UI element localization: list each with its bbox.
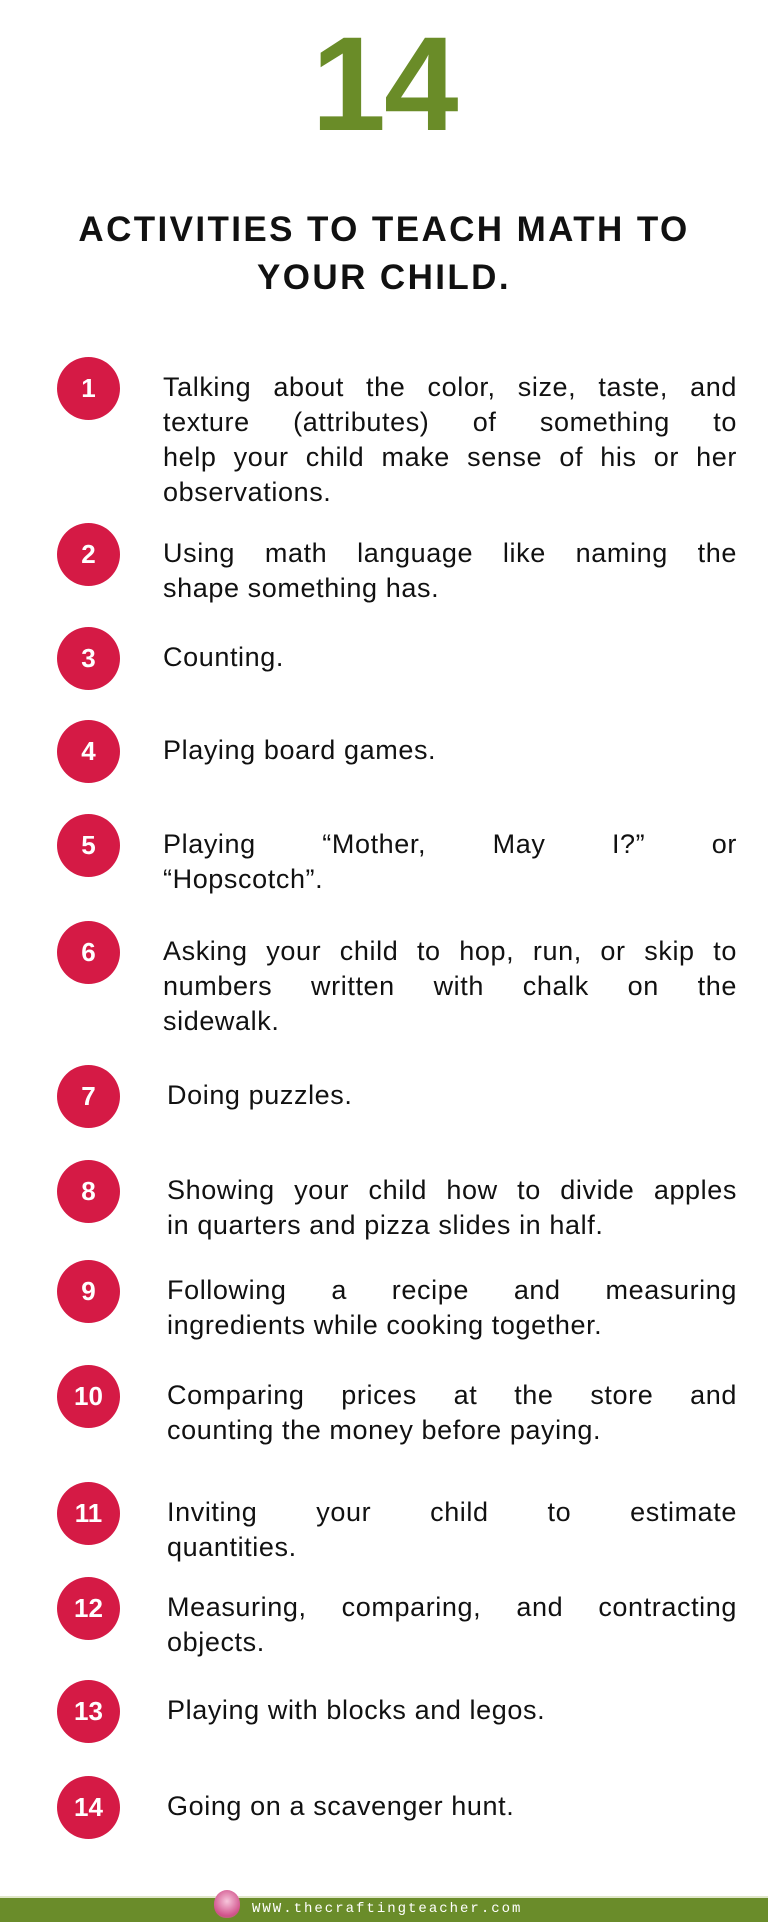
badge 6 (57, 921, 120, 984)
text 12 (167, 1592, 737, 1657)
text 10: Comparing prices at the store and (167, 1380, 737, 1410)
item 10 (57, 1365, 737, 1445)
item 13 (57, 1680, 545, 1743)
text 6: sidewalk. (163, 1006, 279, 1036)
text 1: help your child make sense of his or her (163, 442, 737, 472)
text 2: Using math language like naming the (163, 538, 737, 568)
text 2: shape something has. (163, 573, 439, 603)
badge 13 (57, 1680, 120, 1743)
text 11: quantities. (167, 1532, 297, 1562)
text 1: Talking about the color, size, taste, and (163, 372, 737, 402)
text 13: Playing with blocks and legos. (167, 1695, 545, 1725)
text 3: Counting. (163, 642, 284, 672)
text 9 (167, 1275, 737, 1340)
badge 2 (57, 523, 120, 586)
text 5: Playing “Mother, May I?” or (163, 829, 737, 859)
text 6 (163, 936, 737, 1036)
icon: flower logo (214, 1890, 240, 1918)
badge 11: 11 (75, 1498, 102, 1528)
item 12 (57, 1577, 737, 1657)
badge 14 (57, 1776, 120, 1839)
item 3 (57, 627, 284, 690)
text 8 (167, 1175, 737, 1240)
badge 2: 2 (81, 539, 96, 569)
footer bar (0, 1896, 768, 1922)
badge 4: 4 (81, 736, 96, 766)
text 12: objects. (167, 1627, 265, 1657)
text 5 (163, 829, 737, 894)
item 4 (57, 720, 436, 783)
text 9: ingredients while cooking together. (167, 1310, 602, 1340)
item 14 (57, 1776, 514, 1839)
badge 7: 7 (81, 1081, 96, 1111)
text 1 (163, 372, 737, 507)
text 1: texture (attributes) of something to (163, 407, 737, 437)
text 4: Playing board games. (163, 735, 436, 765)
badge 1 (57, 357, 120, 420)
badge 5 (57, 814, 120, 877)
item 6 (57, 921, 737, 1036)
item 9 (57, 1260, 737, 1340)
badge 12 (57, 1577, 120, 1640)
item 2 (57, 523, 737, 603)
text 5: “Hopscotch”. (163, 864, 323, 894)
badge 5: 5 (81, 830, 96, 860)
item 5 (57, 814, 737, 894)
item 11 (57, 1482, 737, 1562)
badge 6: 6 (81, 937, 96, 967)
badge 7 (57, 1065, 120, 1128)
badge 1: 1 (81, 373, 96, 403)
badge 11 (57, 1482, 120, 1545)
badge 3 (57, 627, 120, 690)
item 8 (57, 1160, 737, 1240)
item 1 (57, 357, 737, 507)
text 14: Going on a scavenger hunt. (167, 1791, 514, 1821)
badge 12: 12 (74, 1593, 103, 1623)
text 6: Asking your child to hop, run, or skip to (163, 936, 737, 966)
text 12: Measuring, comparing, and contracting (167, 1592, 737, 1622)
text 10 (167, 1380, 737, 1445)
title number: 14 (311, 10, 457, 159)
badge 9: 9 (81, 1276, 96, 1306)
heading (78, 210, 690, 297)
heading: YOUR CHILD. (257, 258, 511, 297)
text 2 (163, 538, 737, 603)
badge 4 (57, 720, 120, 783)
badge 14: 14 (74, 1792, 103, 1822)
text 11: Inviting your child to estimate (167, 1497, 737, 1527)
text 11 (167, 1497, 737, 1562)
badge 10: 10 (74, 1381, 103, 1411)
footer url: WWW.thecraftingteacher.com (252, 1901, 522, 1917)
badge 9 (57, 1260, 120, 1323)
text 7: Doing puzzles. (167, 1080, 352, 1110)
text 1: observations. (163, 477, 331, 507)
text 10: counting the money before paying. (167, 1415, 601, 1445)
item 7 (57, 1065, 352, 1128)
badge 8: 8 (81, 1176, 96, 1206)
badge 3: 3 (81, 643, 96, 673)
text 8: Showing your child how to divide apples (167, 1175, 737, 1205)
badge 13: 13 (74, 1696, 103, 1726)
badge 8 (57, 1160, 120, 1223)
text 6: numbers written with chalk on the (163, 971, 737, 1001)
text 8: in quarters and pizza slides in half. (167, 1210, 603, 1240)
text 9: Following a recipe and measuring (167, 1275, 737, 1305)
badge 10 (57, 1365, 120, 1428)
heading: ACTIVITIES TO TEACH MATH TO (78, 210, 690, 249)
